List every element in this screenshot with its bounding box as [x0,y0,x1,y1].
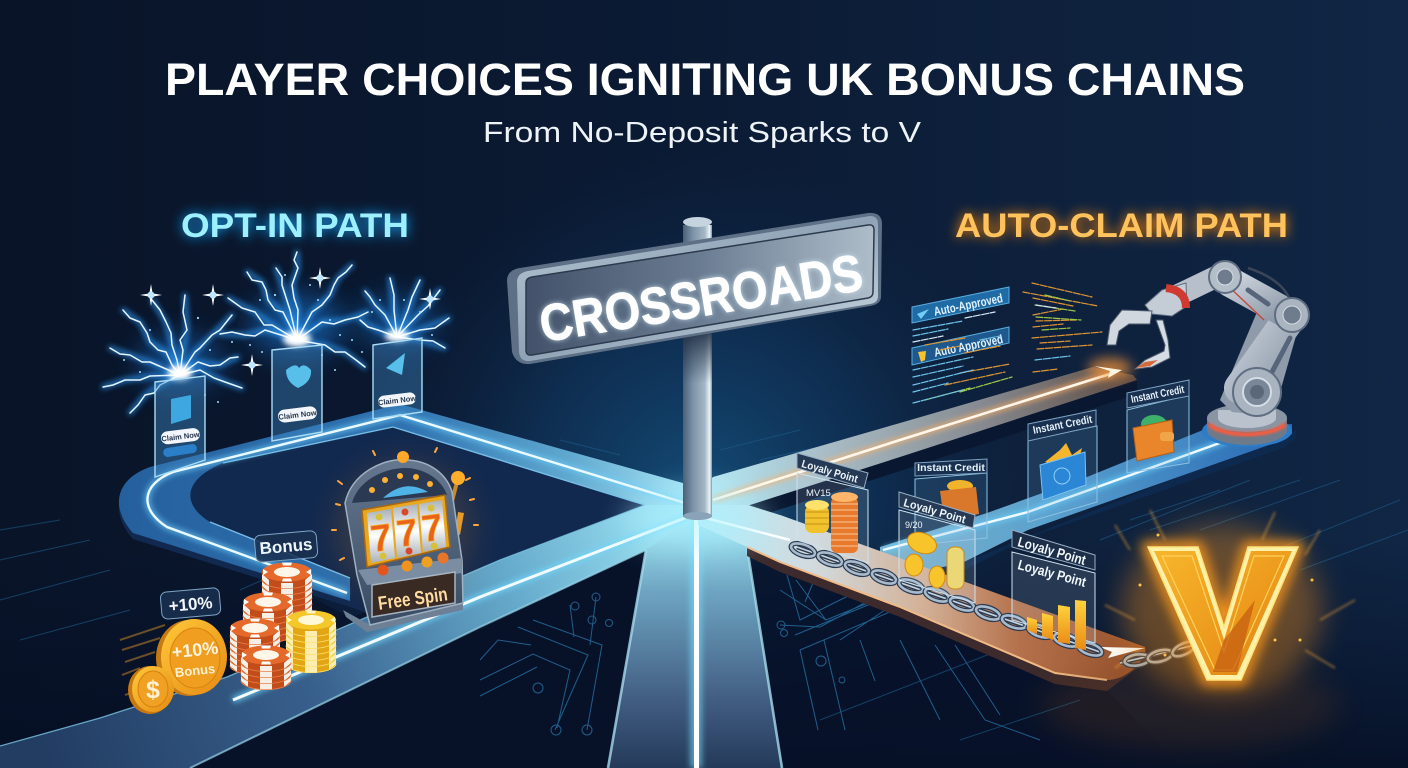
subtitle: From No-Deposit Sparks to V [483,117,922,149]
icon: small orange wallet [940,480,979,520]
panel: loyalty point 2 [899,492,975,603]
icon: phone 3 arrow [386,353,405,375]
panel: loyalty point 1 [797,453,868,563]
icon: slot machine: Free Spin [377,584,449,615]
icon: bonus coins [120,619,227,714]
panel: auto-approved feed [912,283,1102,403]
icon: slot machine [332,448,478,632]
road: blue instant credit lane [880,424,1296,580]
label: instant credit A: Instant Credit [1032,414,1094,437]
chart: loyalty bars [1027,600,1086,650]
text: mv15: MV15 [806,488,831,499]
label: loyalty point 1: Loyaly Point [800,458,859,486]
label: bonus: Bonus [259,535,313,558]
panel: phone 3 [373,338,422,419]
icon: chip stacks [230,562,336,690]
icon: phone 1 graphic [171,395,191,424]
icon: golden v [1040,510,1355,750]
heading: auto-claim path: AUTO-CLAIM PATH [955,207,1288,245]
button: claim now 1: Claim Now [161,430,200,443]
icon: gold and orange stacks [805,492,858,553]
icon: signpost crossroads: CROSSROADS [536,244,867,354]
icon: slot machine: 7 [419,507,445,551]
panel: phone 1 [155,376,205,477]
arrow: orange road head [1088,358,1132,378]
icon: slot machine: 7 [368,517,394,561]
icon: bonus coins: Bonus [174,661,216,680]
label: instant credit C: Instant Credit [917,462,985,474]
text: loyalty point inner: Loyaly Point [1016,556,1088,590]
road: opt-in loop [119,404,690,625]
icon: slot machine: 7 [394,512,420,556]
heading: opt-in path: OPT-IN PATH [181,207,409,245]
button: claim now 2: Claim Now [278,408,317,422]
icon: phone 2 heart shield [286,365,311,388]
heading: auto-claim path: AUTO-CLAIM PATH [955,207,1288,245]
label: loyalty point 3: Loyaly Point [1016,533,1088,568]
panel: loyalty point 3 [1012,530,1095,650]
icon: signpost crossroads: CROSSROADS [536,244,867,354]
circuit traces [480,560,1040,740]
icon: bonus coins: +10% [171,638,219,662]
button: claim now 3: Claim Now [377,394,417,407]
road: copper chain lane [698,505,1148,691]
road: centre downward [608,515,782,768]
icon: bonus coins: $ [146,676,160,704]
crossroads glow [626,492,766,548]
label: instant credit B: Instant Credit [1130,384,1186,406]
label: bonus [254,530,318,563]
icon: orange wallet [1133,415,1174,461]
label: loyalty point 2: Loyaly Point [902,497,967,526]
icon: lightning sparks [103,252,449,413]
text: panel code: 9/20 [905,520,923,530]
icon: signpost crossroads [507,213,882,520]
road: upper right to robot arm [700,367,1137,525]
icon: robot arm [1107,261,1309,447]
chain [789,541,1198,667]
icon: gold nuggets and stack [904,528,964,589]
label: plus ten percent [160,587,221,619]
panel: auto-approved feed: Auto Approved [933,332,1004,360]
panel: instant credit B [1127,380,1189,473]
icon: blue wallet [1040,443,1086,500]
panel: instant credit A [1028,410,1097,522]
label: plus ten percent: +10% [168,593,213,616]
road: lower left [0,505,696,768]
panel: instant credit C [915,459,987,545]
panel: auto-approved feed: Auto-Approved [933,291,1004,319]
panel: phone 2 [272,345,322,441]
title: PLAYER CHOICES IGNITING UK BONUS CHAINS [165,54,1245,105]
heading: opt-in path: OPT-IN PATH [181,207,409,245]
